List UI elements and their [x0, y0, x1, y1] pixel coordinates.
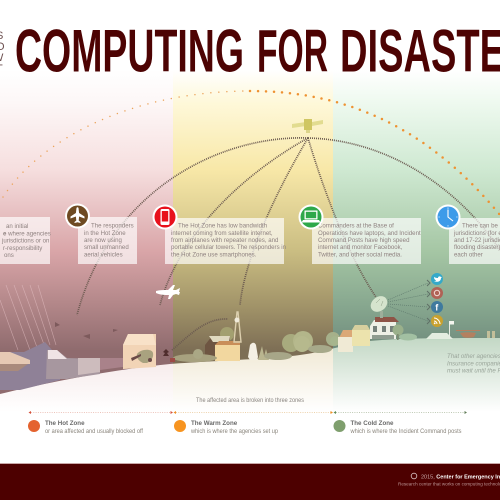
text box: base of operations: Commanders at the Base of [318, 222, 394, 230]
text box: drones [78, 217, 137, 264]
legend: cold zone: The Cold Zone [350, 420, 394, 427]
legend: cold zone: which is where the Incident Command posts [350, 428, 462, 435]
text box: base of operations: internet and monitor Facebook, [318, 244, 403, 251]
footer [0, 463, 500, 500]
text box: drones: are now using [84, 237, 122, 244]
ground hill [0, 338, 500, 402]
text box: base of operations: Twitter, and other social media. [318, 252, 402, 258]
text box: incident agencies: ons [4, 252, 14, 259]
text box: drones: The responders [91, 222, 134, 230]
text box: hot zone bandwidth: from airplanes with repeater nodes, and [171, 237, 278, 244]
legend: hot zone: The Hot Zone [45, 420, 85, 427]
title: FOR [257, 18, 328, 84]
title: COMPUTING [15, 18, 244, 84]
illustration: cold zone village, dish, tent and helicopter [330, 280, 495, 352]
legend: warm zone [174, 420, 279, 435]
panel: cold zone background [333, 70, 500, 400]
panel: hot zone background [0, 70, 173, 400]
illustration: warm zone town and tower [170, 312, 340, 362]
text box: base of operations: Operations have laptops, and Incident [318, 230, 421, 237]
icon: facebook [431, 301, 443, 313]
text box: drones: aerial vehicles [84, 252, 123, 258]
text box: drones: in the Hot Zone [84, 230, 126, 237]
text box: hot zone bandwidth: the Hot Zone use smartphones. [171, 252, 257, 258]
zones caption: The affected area is broken into three zones [196, 398, 304, 404]
icon: drone plane [156, 285, 180, 299]
text box: drones: small unmanned [84, 244, 129, 251]
satellite links [77, 138, 500, 350]
text box: hot zone bandwidth: internet coming from satellite internet, [171, 230, 273, 237]
text box: hot zone bandwidth: The Hot Zone has low bandwidth [178, 222, 267, 230]
text box: base of operations [312, 218, 421, 264]
text box: hot zone bandwidth: portable cellular towers. The responders in [171, 244, 286, 251]
orange dotted arc [3, 91, 500, 215]
legend: hot zone: or area affected and usually blocked off [45, 428, 143, 435]
text box: incident agencies: jurisdictions or on [1, 238, 49, 244]
text box: jurisdictions [449, 218, 500, 264]
legend: hot zone [28, 420, 143, 435]
text box: base of operations: Command Posts have high speed [318, 237, 409, 244]
text box: incident agencies: e where agencies [3, 230, 51, 237]
side title letters [0, 30, 5, 75]
legend: warm zone: which is where the agencies set up [190, 428, 279, 435]
legend: warm zone: The Warm Zone [191, 420, 238, 427]
text box: incident agencies: r-responsibility [3, 245, 43, 252]
text box: incident agencies [0, 217, 51, 264]
zone span markers [28, 411, 467, 414]
icon: laptop [298, 204, 324, 230]
text box: incident agencies: an initial [6, 223, 28, 230]
icon: smartphone [152, 204, 178, 230]
panel: warm zone background [173, 70, 333, 400]
text box: jurisdictions: each other [454, 252, 483, 258]
icon: clock [436, 204, 460, 230]
icon: rss [431, 315, 443, 327]
illustration: hot zone flood and damaged houses [0, 285, 169, 390]
text box: hot zone bandwidth [165, 218, 286, 264]
icon: satellite [292, 119, 323, 133]
icon: facebook: f [435, 302, 439, 312]
icon: pinterest [431, 287, 443, 299]
icon: airplane [65, 204, 90, 228]
legend: cold zone [334, 420, 462, 435]
icon: twitter [431, 273, 443, 285]
